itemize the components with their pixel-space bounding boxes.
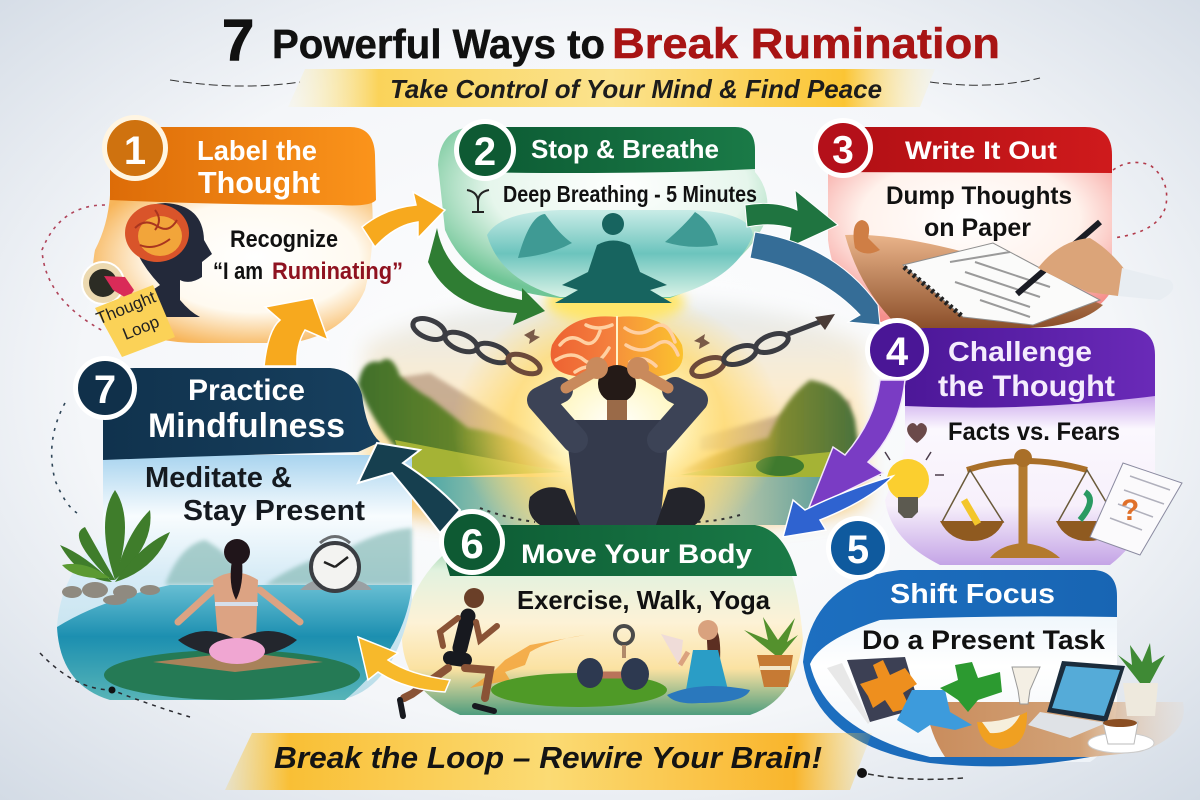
panel 4 heading: the Thought — [938, 370, 1115, 403]
icon: stamp — [854, 220, 880, 254]
panel 5: shift focus — [803, 516, 1184, 766]
dashed bottom-left curve — [40, 653, 190, 717]
icon: potted plant — [744, 617, 798, 687]
number badge 2 — [454, 119, 516, 181]
number badge 5: 5 — [847, 528, 869, 572]
number badge 4 — [865, 318, 929, 382]
title: Break Rumination — [612, 20, 1000, 68]
arrow: yellow to 7 — [358, 637, 450, 692]
title — [222, 8, 1000, 73]
icon: orange bowl — [977, 712, 1027, 749]
panel 3 text: Dump Thoughts — [886, 182, 1072, 210]
icon: heart — [907, 423, 927, 443]
trees left — [358, 359, 565, 470]
meditating figure — [555, 213, 672, 303]
panel 2 heading: Stop & Breathe — [531, 134, 719, 164]
icon: hand and pen — [1017, 222, 1173, 300]
distant hills — [395, 373, 850, 455]
dashed left loop red — [42, 205, 105, 332]
subtitle banner — [170, 69, 1040, 107]
sky — [365, 300, 865, 525]
panel 1 recognize text: Ruminating” — [272, 258, 403, 285]
arrow: 3 to 4 — [750, 232, 880, 325]
icon: orange puzzle piece — [860, 660, 917, 712]
bottom banner: Break the Loop – Rewire Your Brain! — [274, 740, 822, 775]
icon: question document: ? — [1121, 494, 1139, 527]
panel 3 text: on Paper — [924, 214, 1031, 242]
number badge 5 — [826, 516, 890, 580]
panel 7 heading: Practice — [188, 374, 305, 407]
panel 3 heading: Write It Out — [905, 137, 1058, 165]
number badge 3 — [813, 118, 873, 178]
panel 6: move your body — [400, 509, 803, 716]
number badge 3: 3 — [832, 129, 854, 172]
panel 4: challenge the thought — [865, 318, 1182, 565]
icon: blue puzzle piece — [897, 690, 972, 733]
sticky note: thought loop: Loop — [120, 312, 162, 344]
panel 2: stop and breathe — [438, 119, 768, 303]
panel 2 landscape — [487, 210, 753, 297]
icon: green puzzle piece — [940, 662, 1002, 712]
title: Powerful Ways to — [272, 21, 605, 67]
grass — [491, 673, 667, 707]
panel 4 heading — [938, 336, 1115, 403]
icon: breath symbol — [467, 190, 489, 212]
panel 5 blue swoosh — [803, 570, 1117, 766]
sticky note: thought loop — [93, 285, 175, 357]
icon: dumbbell — [577, 626, 649, 690]
arrow: 5 to center — [783, 476, 893, 537]
panel 4 text: Facts vs. Fears — [948, 418, 1120, 446]
number badge 2: 2 — [474, 130, 496, 174]
icon: balance scales — [940, 449, 1120, 558]
arrow: 1 to 2 — [362, 192, 445, 247]
panel 5 heading: Shift Focus — [890, 578, 1055, 609]
number badge 4: 4 — [886, 330, 909, 374]
icon: glass — [1012, 667, 1040, 704]
dotted loop right of panel 3 — [1113, 162, 1167, 238]
number badge 7 — [73, 356, 137, 420]
desk — [845, 235, 1103, 328]
icon: thought bubble — [82, 262, 134, 304]
icon: plant and pot — [1118, 643, 1165, 716]
panel 6 text: Exercise, Walk, Yoga — [517, 585, 771, 615]
panel 3 text — [886, 182, 1072, 242]
arrow: 6 to 7 — [358, 443, 460, 533]
icon: question document — [1090, 463, 1182, 555]
lake — [57, 585, 412, 700]
title: 7 — [222, 8, 254, 73]
icon: rocks — [62, 582, 160, 605]
bushes right — [756, 456, 804, 476]
icon: plant — [60, 490, 170, 582]
dotted path near lake — [480, 508, 740, 522]
panel 1 heading: Label the — [197, 135, 317, 166]
icon: laptop — [1028, 661, 1125, 738]
small arrowheads — [524, 329, 710, 349]
sticky note: thought loop: Thought — [93, 287, 159, 328]
icon: coffee cup — [1088, 719, 1154, 753]
arrow: 4 to center — [808, 380, 905, 510]
panel 2 text: Deep Breathing - 5 Minutes — [503, 181, 757, 207]
panel 5 text: Do a Present Task — [862, 625, 1106, 655]
panel 7 text — [145, 462, 365, 527]
trees right — [680, 380, 862, 472]
panel 1 recognize text — [213, 226, 403, 285]
panel 6 heading: Move Your Body — [521, 539, 752, 569]
icon: woman in yoga pose — [661, 620, 750, 703]
panel 7 text: Meditate & — [145, 462, 292, 494]
icon: light bulb — [872, 452, 944, 518]
panel 7 text: Stay Present — [183, 495, 365, 527]
dashed left loop dark — [52, 403, 77, 513]
panel 7 heading: Mindfulness — [148, 407, 345, 445]
brain — [551, 316, 683, 377]
arrow: 2 to 3 — [745, 190, 838, 248]
right chain — [689, 314, 835, 380]
sun glow — [452, 290, 782, 560]
number badge 1: 1 — [124, 129, 146, 173]
panel 4 heading: Challenge — [948, 336, 1092, 367]
panel 3: write it out — [813, 118, 1173, 328]
lake — [425, 477, 826, 525]
meadow right — [680, 452, 830, 478]
panel 7 heading — [148, 374, 345, 445]
panel 5 wooden table — [925, 702, 1184, 757]
icon: head with brain — [125, 203, 212, 317]
icon: books — [827, 657, 920, 724]
arrow: 7 to 1 — [264, 298, 328, 366]
panel 1 recognize text: Recognize — [230, 226, 338, 253]
dotted path under panel 5 — [857, 768, 963, 779]
icon: runner — [400, 588, 497, 716]
person — [529, 357, 705, 525]
panel 7: practice mindfulness — [57, 356, 412, 700]
number badge 6: 6 — [460, 520, 484, 567]
bottom banner — [225, 733, 872, 790]
meadow left — [395, 440, 565, 478]
lower glow from meditator — [545, 280, 685, 324]
panel 1: label the thought — [82, 115, 403, 357]
hazy trees — [165, 528, 412, 585]
center scene — [358, 280, 865, 560]
panel 1 recognize text: “I am — [213, 258, 263, 285]
orange energy bolt — [470, 635, 585, 688]
number badge 6 — [439, 509, 505, 575]
number badge 1 — [102, 115, 168, 181]
panel 1 heading — [197, 135, 320, 200]
panel 1 heading: Thought — [198, 165, 320, 200]
arrow: 2 to center — [428, 228, 545, 325]
number badge 7: 7 — [94, 368, 116, 412]
mat — [153, 652, 323, 672]
icon: meditating woman — [178, 539, 300, 664]
icon: alarm clock — [300, 536, 372, 591]
icon: notebook — [903, 243, 1100, 325]
left chain — [410, 314, 543, 378]
island — [104, 650, 360, 700]
subtitle banner: Take Control of Your Mind & Find Peace — [390, 74, 882, 104]
